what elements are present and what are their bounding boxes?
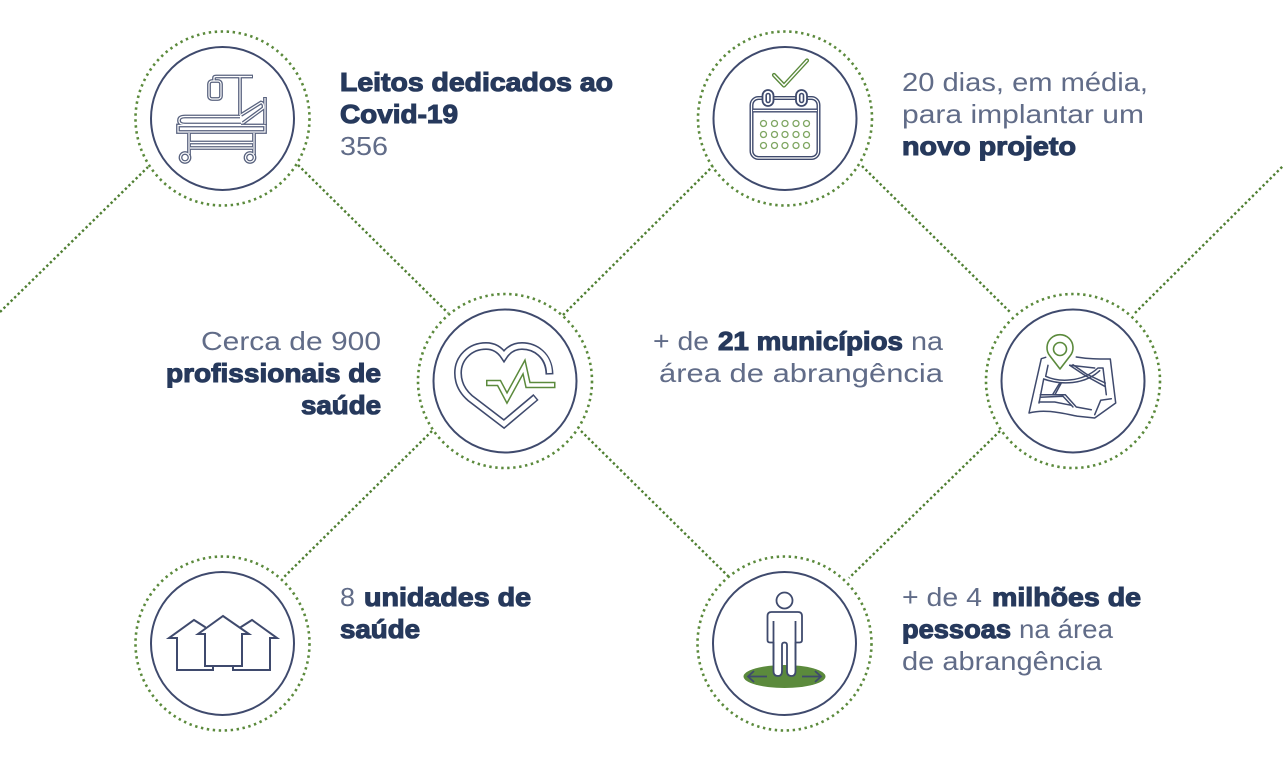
text: health professionals: saúde — [301, 390, 381, 420]
text: health units: saúde — [340, 614, 420, 644]
icon: heart with pulse — [418, 294, 592, 468]
panel: population — [698, 556, 1148, 730]
icon: calendar with check — [698, 32, 872, 206]
text: population: na área — [1019, 614, 1114, 644]
text: health professionals: profissionais de — [166, 358, 381, 388]
text: population: milhões de — [992, 582, 1141, 612]
panel: implantation time — [698, 32, 1155, 206]
icon: hospital bed — [136, 32, 310, 206]
text: implantation time: 20 dias, em média, — [902, 67, 1148, 97]
text: beds: Leitos dedicados ao — [340, 67, 613, 97]
text: municipalities: + de — [653, 326, 709, 356]
text: health units: 8 — [340, 582, 355, 612]
text: municipalities: 21 municípios — [718, 326, 903, 356]
text: health units: unidades de — [364, 582, 531, 612]
connecting dotted lines — [0, 165, 1283, 578]
text: population: + de 4 — [902, 582, 982, 612]
text: beds: Covid-19 — [340, 99, 458, 129]
text: beds: 356 — [340, 131, 388, 161]
text: health professionals: Cerca de 900 — [201, 326, 381, 356]
text: implantation time: para implantar um — [902, 99, 1144, 129]
text: municipalities: área de abrangência — [659, 358, 944, 388]
panel: municipalities — [653, 294, 1160, 468]
text: population: de abrangência — [902, 646, 1103, 676]
panel: hospital beds — [136, 32, 620, 206]
panel: health professionals — [166, 294, 592, 468]
icon: person on green area — [698, 556, 872, 730]
text: implantation time: novo projeto — [902, 131, 1076, 161]
text: population: pessoas — [902, 614, 1011, 644]
icon: map with pin — [986, 294, 1160, 468]
icon: three houses — [136, 556, 310, 730]
text: municipalities: na — [911, 326, 944, 356]
panel: health units — [136, 556, 538, 730]
